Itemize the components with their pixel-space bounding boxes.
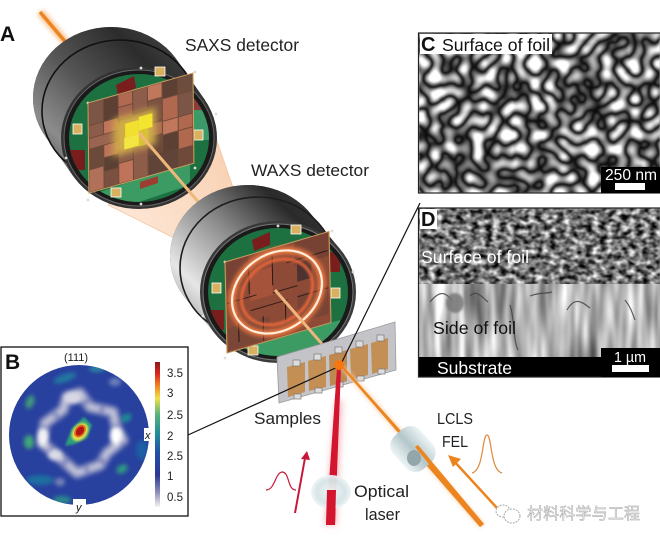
x axis tag: x (144, 430, 151, 442)
panel D: cross-section micrograph (418, 208, 660, 378)
detector body (170, 185, 356, 363)
watermark icon (496, 505, 520, 523)
substrate label: Substrate (437, 358, 512, 378)
panel C title: C (421, 34, 435, 56)
WAXS tile panel with rings (225, 231, 331, 353)
diffraction rings (216, 233, 338, 351)
scattering cone between detectors (108, 138, 236, 240)
panel D scale bar: 1 µm (614, 349, 646, 366)
panel C scale bar: 250 nm (605, 167, 657, 184)
optical laser beam (325, 368, 342, 525)
colour bar labels: 3 (167, 388, 173, 400)
panel D border (418, 208, 660, 377)
x axis tag (144, 428, 152, 442)
panel C scale bar (601, 167, 660, 193)
panel D scale bar (601, 348, 660, 377)
letter D: D (421, 209, 435, 231)
colour bar labels: 2.5 (167, 410, 183, 422)
WAXS detector (170, 185, 356, 363)
pole figure disc (9, 365, 149, 505)
SAXS tile mosaic (88, 73, 194, 193)
colour bar labels: 2 (167, 431, 173, 443)
beam focus spot (334, 360, 344, 370)
WAXS label: WAXS detector (251, 161, 369, 180)
red arrow (295, 451, 310, 513)
circuit board face (202, 225, 354, 360)
panel C title: Surface of foil (442, 35, 550, 55)
samples label: Samples (254, 409, 321, 428)
colour bar labels: 3.5 (167, 368, 183, 380)
y axis tag (73, 499, 86, 514)
colour bar labels (167, 368, 183, 504)
panel C: surface micrograph (418, 33, 660, 193)
orange arrow (448, 455, 497, 508)
letter B: B (5, 351, 20, 374)
colour bar (155, 362, 160, 507)
detector body (33, 27, 217, 209)
panel letter A: A (0, 23, 15, 46)
orange pulse (472, 435, 502, 473)
optical laser label: laser (365, 506, 400, 524)
colour bar labels: 2.5 (167, 451, 183, 463)
incoming FEL beam (40, 12, 74, 52)
surface label: Surface of foil (421, 247, 529, 267)
optical laser label (354, 483, 409, 524)
SAXS label: SAXS detector (185, 35, 299, 55)
optical lens (311, 475, 351, 525)
beam WAXS to sample (275, 290, 322, 344)
circuit board face (65, 67, 217, 205)
WAXS-to-sample cone (300, 325, 337, 350)
FEL beam (341, 366, 484, 527)
LCLS FEL label: LCLS (437, 411, 473, 428)
y axis tag: y (75, 502, 83, 514)
pointer line to panels C and D (340, 203, 420, 366)
colour bar labels: 0.5 (167, 492, 183, 504)
optical laser label: Optical (354, 483, 409, 501)
watermark text: 材料科学与工程 (527, 505, 640, 523)
colour bar labels: 1 (167, 471, 173, 483)
FEL lens (385, 421, 484, 527)
side label: Side of foil (433, 318, 516, 338)
plane index: (111) (64, 352, 88, 364)
LCLS FEL label (437, 411, 473, 451)
SAXS detector (33, 27, 217, 209)
LCLS FEL label: FEL (442, 434, 468, 451)
pointer line to panel B (188, 366, 340, 435)
panel B: pole figure (1, 347, 188, 516)
beam SAXS to WAXS (139, 133, 207, 212)
red pulse (266, 472, 296, 490)
foil edge features (430, 292, 635, 350)
sample holder (277, 322, 396, 403)
